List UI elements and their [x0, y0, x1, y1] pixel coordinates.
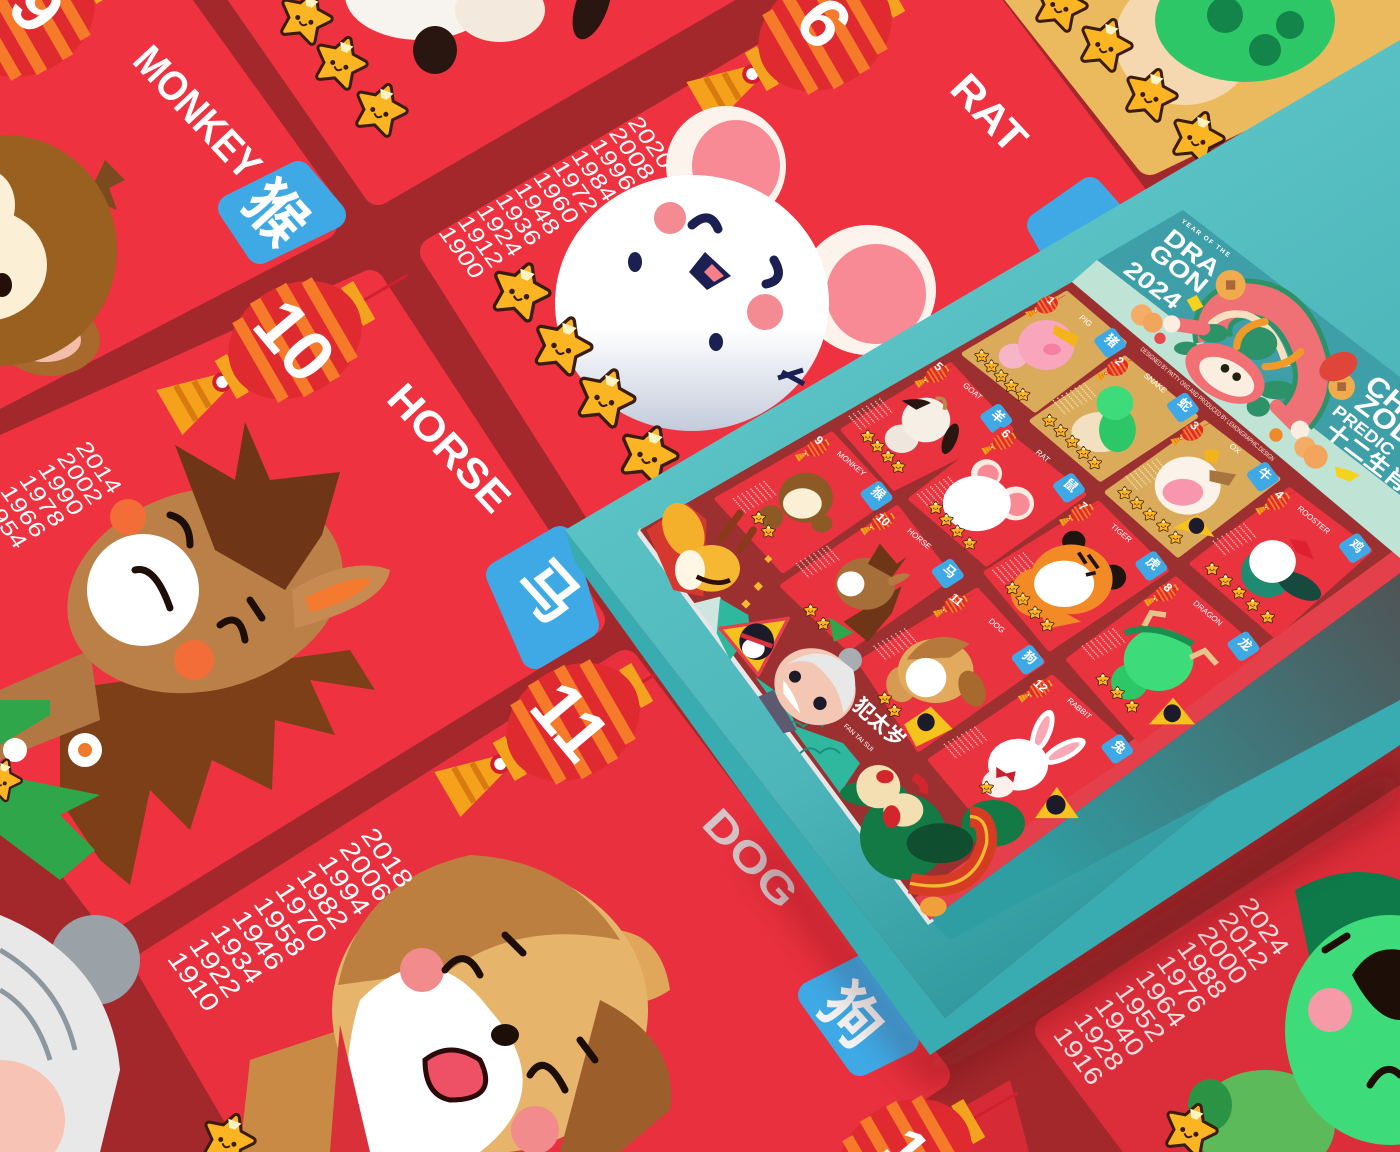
- horse birth years: 2002: [51, 449, 108, 509]
- title: GON: [1143, 239, 1214, 298]
- poster heading: PREDIC: [1329, 402, 1399, 459]
- dog birth years: 2018: [355, 823, 419, 892]
- page curl shadow: [930, 565, 1400, 940]
- dragon birth years: 1916: [1048, 1021, 1110, 1090]
- panel: rabbit: RABBIT: [1065, 696, 1094, 721]
- illustration: lion dance top: [1131, 270, 1362, 482]
- panel: rat: RAT: [1034, 448, 1052, 464]
- rat birth years: 1996: [585, 135, 641, 195]
- panel: rabbit: [931, 672, 1135, 840]
- panel: horse: [783, 505, 965, 649]
- lantern 11: 11: [515, 667, 625, 777]
- panel: snake: [1033, 351, 1200, 479]
- panel: teal box: [565, 40, 1400, 1055]
- title: DRA: [1158, 224, 1226, 282]
- page edge: [637, 528, 934, 925]
- panel: snake gold card: [1000, 0, 1400, 164]
- rat birth years: 1912: [452, 212, 508, 272]
- panel: horse card: [0, 227, 593, 915]
- panel: tiger: TIGER: [1109, 522, 1134, 544]
- icon: dog character badge: 狗: [806, 972, 896, 1061]
- stars: [277, 0, 410, 136]
- illustration: waves: [693, 597, 860, 793]
- mini cards: [718, 288, 1372, 840]
- panel: horse: 10: [873, 510, 893, 529]
- text: fan tai sui: 犯太岁: [848, 694, 910, 753]
- illustration: grandma: [758, 633, 870, 740]
- panel: goat card: [232, 0, 740, 190]
- teal title band: [1097, 210, 1400, 495]
- dragon birth years: 2000: [1192, 921, 1254, 989]
- panel: pig: [965, 288, 1128, 410]
- panel: rat: [911, 424, 1087, 564]
- panel: horse: HORSE: [905, 527, 933, 551]
- horse birth years: 2014: [70, 438, 126, 498]
- illustration: horse: [0, 422, 390, 885]
- text: fan tai sui: FAN TAI SUI: [842, 723, 875, 753]
- dragon birth years: 1976: [1151, 949, 1213, 1018]
- lantern 10: [142, 227, 435, 460]
- panel: bottom cards: [752, 790, 1400, 1152]
- panel: goat: 羊: [988, 407, 1008, 426]
- dragon birth years: 1940: [1089, 993, 1151, 1061]
- panel: ox: 牛: [1254, 465, 1275, 484]
- illustration: left page art: [647, 496, 1025, 917]
- mint pattern band: [1072, 260, 1400, 558]
- panel: goat: 5: [931, 359, 946, 374]
- panel: rooster: ROOSTER: [1295, 504, 1332, 536]
- dragon birth years: 1988: [1172, 935, 1233, 1004]
- text: year of the: YEAR OF THE: [1180, 218, 1232, 260]
- panel: monkey: [718, 431, 894, 570]
- dog birth years: 1958: [248, 892, 312, 961]
- rat birth years: 1936: [490, 190, 546, 250]
- label: monkey: MONKEY: [124, 36, 271, 189]
- panel: snake: 2: [1112, 354, 1127, 369]
- panel: monkey: 9: [811, 433, 827, 448]
- horse birth years: 1990: [33, 460, 89, 520]
- icon: horse character badge: 马: [503, 547, 593, 636]
- panel: goat: GOAT: [961, 381, 984, 402]
- panel: monkey card: [0, 0, 332, 418]
- credit line: DESIGNED BY PATTY ONG AND PRODUCED BY LEMONGRAPHIC.DESIGN: [1139, 346, 1276, 463]
- stars: [1032, 0, 1227, 164]
- panel: dog: DOG: [987, 617, 1007, 635]
- illustration: rat: [555, 106, 936, 431]
- panel: rooster: 4: [1272, 488, 1287, 502]
- dog birth years: 1910: [162, 947, 226, 1016]
- panel: rat: 6: [999, 426, 1014, 441]
- panel: tiger: 虎: [1143, 554, 1163, 573]
- panel: monkey: MONKEY: [835, 449, 868, 478]
- panel: pig: PIG: [1077, 313, 1094, 328]
- title: 2024: [1118, 256, 1188, 315]
- horse birth years: 1978: [14, 471, 70, 531]
- panel: tiger: 7: [1076, 499, 1091, 514]
- dog birth years: 1946: [226, 905, 290, 975]
- panel: dragon: DRAGON: [1191, 599, 1224, 628]
- rat birth years: 1948: [509, 179, 565, 239]
- dragon birth years: 1928: [1068, 1007, 1130, 1076]
- box shadow: [760, 760, 1400, 1085]
- lantern 9: [0, 0, 168, 138]
- panel: pig: 1: [1044, 295, 1057, 307]
- panel: dragon: [1069, 576, 1261, 740]
- panel: dog: 11: [947, 591, 967, 609]
- illustration: grandma: [0, 915, 140, 1152]
- icon: monkey character badge: 猴: [230, 169, 320, 258]
- rat birth years: 1924: [471, 201, 527, 261]
- panel: pig: 猪: [1101, 331, 1122, 350]
- dog birth years: 1922: [183, 933, 247, 1002]
- panel: dragon: 龙: [1235, 635, 1256, 654]
- dog birth years: 1970: [269, 878, 333, 947]
- illustration: dog: [200, 855, 671, 1152]
- panel: booklet poster: [637, 210, 1400, 940]
- lantern 6: [672, 0, 965, 152]
- poster heading: [1320, 370, 1400, 511]
- lantern 10: 10: [238, 285, 351, 398]
- panel: snake: SNAKE: [1142, 371, 1169, 395]
- panel: dog: [861, 587, 1045, 749]
- dog birth years: 1994: [312, 850, 376, 920]
- icon: rat character badge: [1040, 190, 1130, 260]
- illustration: bottom dragon lion: [840, 765, 1025, 917]
- dog birth years: 2006: [334, 837, 398, 906]
- panel: ox: OX: [1228, 442, 1243, 456]
- dog birth years: 1934: [205, 919, 269, 989]
- panel: goat: [844, 357, 1014, 488]
- label: horse: HORSE: [378, 374, 520, 521]
- lantern 11: [420, 609, 713, 842]
- dog birth years: 1982: [291, 864, 355, 934]
- label: dog: DOG: [693, 799, 808, 917]
- illustration: snake: [1115, 0, 1335, 105]
- lantern 1: [752, 1045, 1045, 1152]
- panel: ox: 3: [1187, 418, 1202, 433]
- dragon birth years: 1964: [1130, 964, 1192, 1032]
- dragon birth years: 2024: [1233, 892, 1295, 960]
- icon: warning penguin: [720, 618, 788, 675]
- panel: rooster: [1193, 485, 1372, 635]
- rat birth years: 1984: [566, 146, 622, 206]
- dragon birth years: 1952: [1110, 978, 1172, 1047]
- panel: rabbit: 12: [1031, 676, 1051, 695]
- panel: ox: [1108, 415, 1280, 555]
- illustration: left dragon: [647, 496, 772, 609]
- dragon birth years: 2012: [1213, 906, 1275, 975]
- panel: monkey: 猴: [868, 484, 889, 503]
- rat birth years: 2008: [603, 124, 660, 184]
- illustration: monkey: [0, 135, 125, 376]
- panel: rat card: [433, 0, 1135, 590]
- panel: dragon: 8: [1160, 580, 1176, 595]
- panel: dog card: [150, 609, 935, 1152]
- rat birth years: 1900: [433, 223, 489, 283]
- panel: dog: 狗: [1019, 648, 1040, 667]
- panel: rooster: 鸡: [1347, 536, 1367, 555]
- rat birth years: 1972: [547, 157, 603, 217]
- panel: rabbit: 兔: [1109, 737, 1130, 756]
- page base: [640, 282, 1400, 920]
- label: rat: RAT: [941, 64, 1037, 162]
- panel: rat: 鼠: [1061, 476, 1081, 495]
- panel: snake: 蛇: [1174, 395, 1195, 414]
- panel: tiger: [987, 496, 1169, 649]
- illustration: goat: [345, 0, 619, 74]
- stars: [489, 259, 681, 484]
- rat birth years: 2020: [622, 113, 678, 173]
- bottom-right lighter strip: [915, 546, 1400, 920]
- panel: horse: 马: [939, 562, 960, 581]
- illustration: dragon: [1162, 872, 1400, 1152]
- rat birth years: 1960: [528, 168, 584, 228]
- title: [1118, 224, 1226, 315]
